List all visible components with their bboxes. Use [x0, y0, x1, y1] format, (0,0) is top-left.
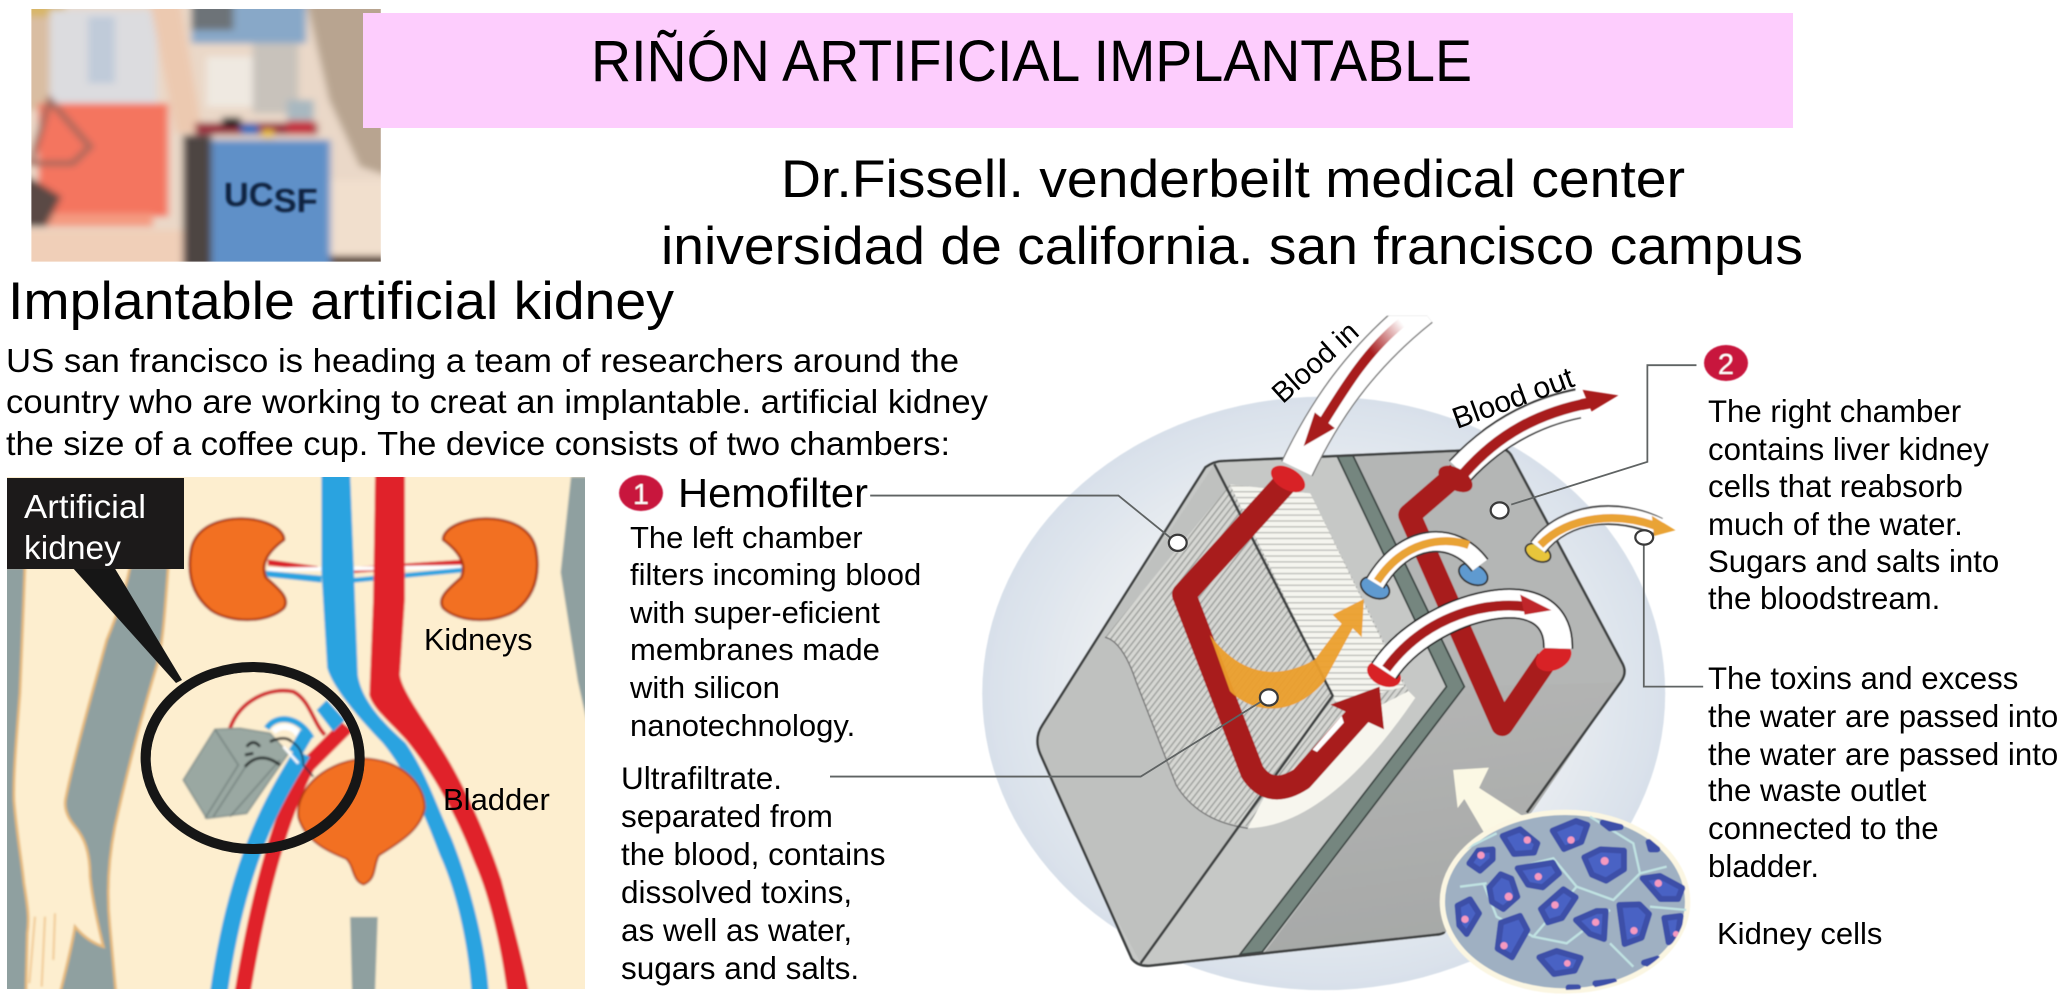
text: toxins and waste [1708, 661, 2058, 884]
text: toxins and waste: the waste outlet [1708, 773, 1927, 808]
label: kidney cells: Kidney cells [1717, 916, 1882, 951]
text: right chamber: contains liver kidney [1708, 432, 1989, 467]
callout points [1169, 502, 1653, 706]
blood vessels and organs [190, 473, 537, 992]
body shading: arm and torso shadows [3, 567, 168, 993]
body diagram: kidney placement [0, 470, 600, 1000]
title banner: RIÑÓN ARTIFICIAL IMPLANTABLE [591, 29, 1472, 94]
heading: implantable artificial kidney: Implantable artificial kidney [8, 272, 675, 331]
red blood path: left chamber [1184, 480, 1364, 787]
kidney cells inset [1442, 812, 1688, 991]
subtitle: researcher and institution [661, 150, 1803, 276]
text: toxins and waste: the water are passed into [1708, 699, 2058, 734]
text: ultrafiltrate: Ultrafiltrate. [621, 760, 782, 796]
text: right chamber: Sugars and salts into [1708, 544, 1999, 579]
cell bodies [1458, 821, 1682, 988]
text: ultrafiltrate: dissolved toxins, [621, 874, 852, 910]
text: left chamber: with super-eficient [629, 595, 880, 630]
red blood path: right chamber [1409, 473, 1547, 725]
text: left chamber [629, 520, 921, 743]
badge 1 [619, 475, 663, 511]
body shading: right side and between legs [350, 477, 589, 992]
callout box: artificial kidney: Artificial [24, 489, 146, 526]
device diagram: implantable kidney cutaway [830, 309, 1703, 990]
text: left chamber: nanotechnology. [630, 708, 855, 743]
backdrop disc [982, 397, 1665, 990]
callout box: artificial kidney: kidney [24, 530, 121, 567]
artificial kidney device in the abdomen [183, 691, 345, 818]
text: right chamber: the bloodstream. [1708, 581, 1940, 616]
cell nuclei [1461, 836, 1679, 967]
intro paragraph [6, 342, 989, 462]
device body [1025, 435, 1650, 974]
badge 2: 2 [1718, 349, 1734, 381]
blood in tube [1266, 309, 1422, 498]
photo: UCSF device on a lab bench: SF [274, 182, 318, 219]
heading: hemofilter: Hemofilter [678, 470, 868, 516]
title banner [363, 13, 1793, 128]
label: blood out: Blood out [1448, 361, 1579, 436]
text: toxins and waste: The toxins and excess [1708, 661, 2018, 696]
separator wall [1240, 455, 1464, 955]
text: ultrafiltrate: the blood, contains [621, 836, 885, 872]
text: left chamber: The left chamber [630, 520, 863, 555]
waste outlet tube [1522, 515, 1675, 566]
text: ultrafiltrate [621, 760, 885, 986]
text: right chamber [1708, 394, 1999, 616]
badge 1: 1 [633, 479, 649, 511]
text: right chamber: The right chamber [1708, 394, 1961, 429]
subtitle: researcher and institution: iniversidad de california. san francisco campus [661, 217, 1803, 276]
text: ultrafiltrate: separated from [621, 798, 833, 834]
text: ultrafiltrate: as well as water, [621, 912, 852, 948]
text: left chamber: membranes made [630, 632, 880, 667]
text: right chamber: cells that reabsorb [1708, 469, 1963, 504]
text: toxins and waste: connected to the [1708, 811, 1939, 846]
intro paragraph: country who are working to creat an implantable. artificial kidney [6, 383, 989, 420]
intro paragraph: the size of a coffee cup. The device consists of two chambers: [6, 425, 950, 462]
photo: UCSF device on a lab bench: UC [224, 176, 279, 213]
photo: UCSF device on a lab bench [31, 9, 381, 262]
blood out tube [1434, 390, 1618, 498]
label: blood in: Blood in [1266, 316, 1365, 410]
device edges [1037, 449, 1625, 966]
leader lines [830, 365, 1703, 777]
label: bladder: Bladder [443, 782, 550, 817]
connector tube: filtrate [1357, 541, 1491, 603]
ultrafiltrate orange arrow [1210, 599, 1364, 709]
callout box: artificial kidney [7, 478, 184, 569]
magnifier circle and pointer [72, 567, 361, 850]
text: toxins and waste: the water are passed into [1708, 737, 2058, 772]
intro paragraph: US san francisco is heading a team of researchers around the [6, 342, 959, 379]
text: right chamber: much of the water. [1708, 507, 1963, 542]
text: toxins and waste: bladder. [1708, 849, 1819, 884]
hatched filter membrane [1105, 484, 1409, 826]
subtitle: researcher and institution: Dr.Fissell. venderbeilt medical center [781, 150, 1685, 209]
connector tube: blood [1363, 594, 1576, 692]
text: ultrafiltrate: sugars and salts. [621, 950, 859, 986]
label: kidneys: Kidneys [424, 623, 533, 657]
badge 2 [1704, 345, 1748, 381]
text: left chamber: filters incoming blood [630, 557, 921, 592]
text: left chamber: with silicon [629, 670, 780, 705]
cream pointer arrow [1453, 768, 1538, 849]
cell membranes [1460, 817, 1687, 967]
